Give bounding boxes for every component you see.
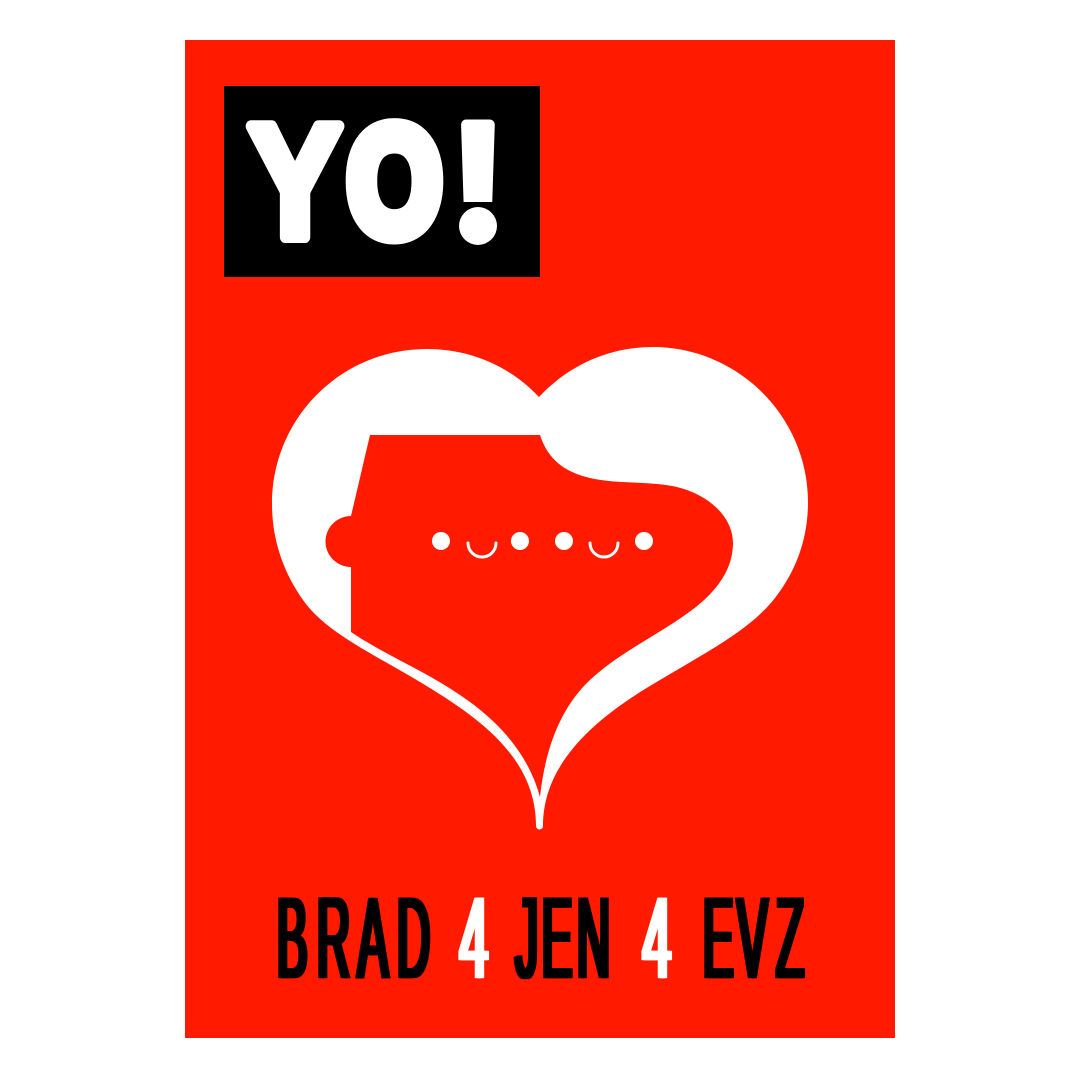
logo: YO!: O [348,96,441,267]
heart illustration [272,347,808,830]
slogan: BRAD 4 JEN 4 EVZ: JEN [515,874,610,1002]
heart: white outer shape [272,347,808,830]
logo: YO!: ! [450,89,506,273]
face profile with ear [326,435,733,797]
slogan: BRAD 4 JEN 4 EVZ: 4 [643,874,671,1002]
slogan: BRAD 4 JEN 4 EVZ: BRAD [277,874,430,1002]
slogan: BRAD 4 JEN 4 EVZ: 4 [460,874,488,1002]
poster background panel [185,40,895,1038]
slogan: BRAD 4 JEN 4 EVZ [277,874,804,1002]
logo: YO!: Y [248,92,342,272]
faces: eyes and smiles [432,532,653,557]
logo: YO! [224,86,540,277]
slogan: BRAD 4 JEN 4 EVZ: EVZ [703,874,804,1002]
